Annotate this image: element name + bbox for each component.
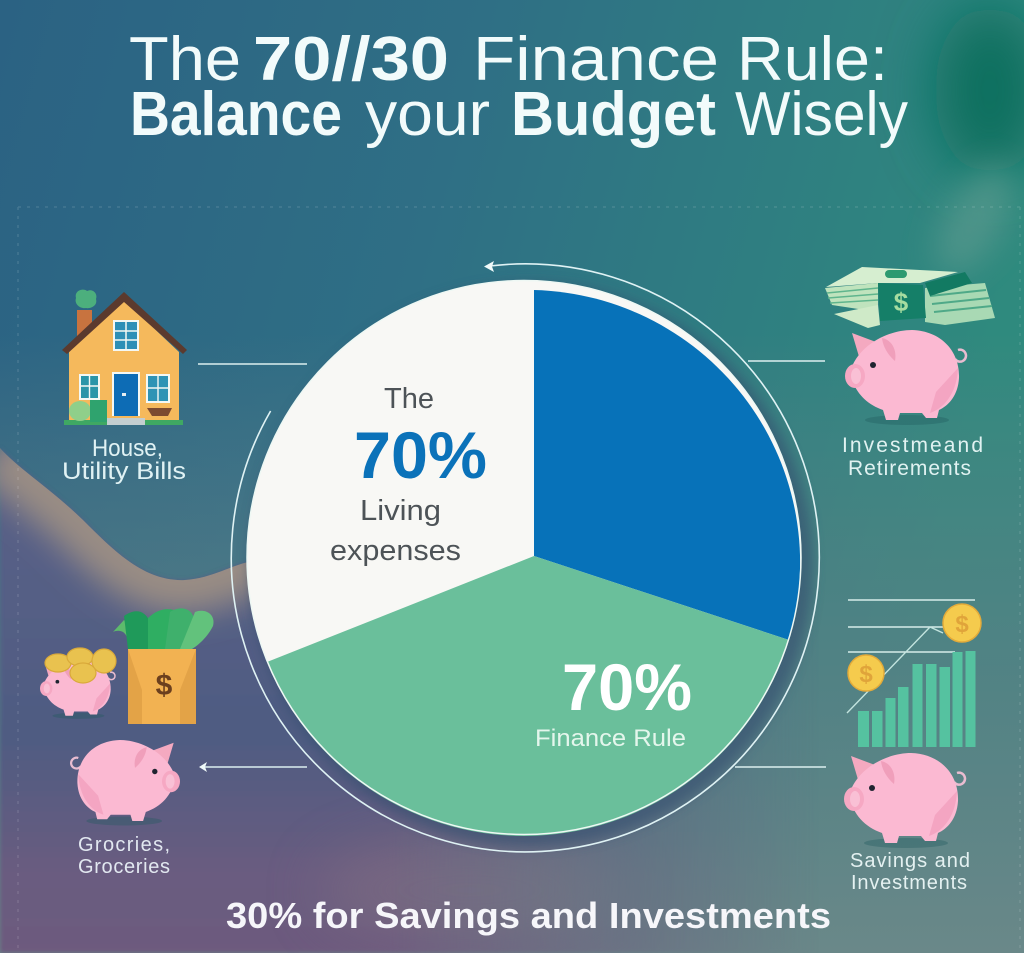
label: groceries: Grocries, <box>78 834 170 856</box>
icon: grocery bag <box>113 608 214 724</box>
icon: growth bar chart with coins: $ <box>955 611 969 638</box>
label: investment: Investmeand <box>842 434 983 457</box>
green slice labels: Finance Rule <box>535 725 686 752</box>
title: Budget <box>511 80 716 149</box>
title: Balance <box>130 80 342 149</box>
label: savings <box>850 850 970 894</box>
white slice labels: The <box>384 383 434 415</box>
label: investment: Retirements <box>848 457 971 480</box>
outer circular arrow <box>231 261 819 852</box>
icon: cash stack: $ <box>894 287 909 317</box>
pie rim <box>247 280 801 834</box>
ring shadow <box>249 283 813 847</box>
connector lines <box>198 361 826 772</box>
icon: investment pig <box>845 330 966 425</box>
label: groceries: Groceries <box>78 856 170 878</box>
white slice labels: Living <box>360 495 441 527</box>
label: savings: Savings and <box>850 850 970 872</box>
title: Wisely <box>735 80 908 149</box>
icon: grocery bag: $ <box>156 669 173 702</box>
label: house: Utility Bills <box>62 458 186 485</box>
white slice labels: expenses <box>330 535 461 567</box>
pig body <box>845 330 966 425</box>
white slice <box>247 280 801 834</box>
label: investment <box>842 434 983 480</box>
title: Finance <box>473 25 719 94</box>
title: your <box>365 80 490 149</box>
icon: cash stack <box>825 267 995 328</box>
icon: savings pig <box>844 753 965 848</box>
title <box>129 25 908 149</box>
white slice labels <box>330 383 487 567</box>
icon: house <box>62 290 187 425</box>
icon: small pig with coins <box>40 648 116 719</box>
green slice labels <box>535 650 692 752</box>
blue slice <box>534 290 800 640</box>
icon: grocery pig <box>71 740 180 826</box>
white slice labels: 70% <box>354 418 487 492</box>
label: savings: Investments <box>851 872 967 894</box>
footer caption: 30% for Savings and Investments <box>226 895 831 936</box>
icon: growth bar chart with coins <box>847 600 981 747</box>
title: 70//30 <box>253 25 449 94</box>
pie chart with ring <box>231 261 819 852</box>
label: house: House, <box>92 435 163 462</box>
green slice <box>267 556 789 836</box>
title: The <box>129 25 241 94</box>
label: groceries <box>78 834 170 878</box>
green slice labels: 70% <box>562 650 692 724</box>
icon: growth bar chart with coins: $ <box>859 661 873 688</box>
label: house <box>62 435 186 485</box>
title: Rule: <box>737 25 888 94</box>
